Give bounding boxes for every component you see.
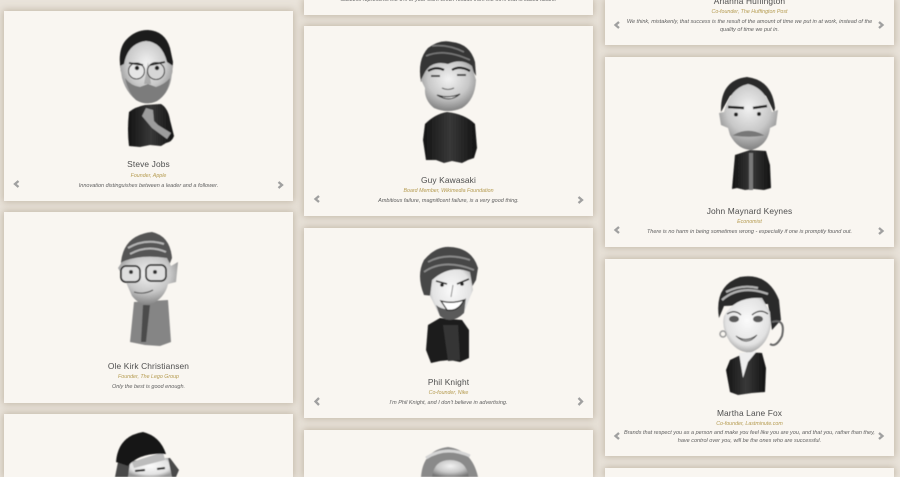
arrow: next xyxy=(278,181,284,189)
panel: bottom card column 3 (cropped) xyxy=(605,468,894,477)
name: Phil Knight xyxy=(428,376,469,386)
quote: Only the best is good enough. xyxy=(112,384,185,390)
quote: quality of time we put in. xyxy=(720,27,779,33)
quote: I'm Phil Knight, and I don't believe in advertising. xyxy=(390,400,507,406)
quote xyxy=(624,430,875,444)
quote xyxy=(627,19,872,33)
name: Martha Lane Fox xyxy=(717,408,782,418)
panel: bottom card column 2 (cropped) xyxy=(304,430,593,477)
panel: Guy Kawasaki xyxy=(304,26,593,216)
arrow: next xyxy=(878,21,884,29)
panel: Arianna Huffington (cropped) xyxy=(605,0,894,45)
portrait: cropped man xyxy=(420,446,478,477)
quote: We think, mistakenly, that success is the result of the amount of time we put in at work, instead of the xyxy=(627,19,872,25)
role: Co-founder, Lastminute.com xyxy=(716,420,783,426)
panel: Ole Kirk Christiansen xyxy=(4,212,293,402)
name: Steve Jobs xyxy=(127,159,170,169)
arrow: next xyxy=(578,397,584,406)
portrait: Guy Kawasaki xyxy=(419,40,478,164)
arrow: previous xyxy=(314,397,320,406)
arrow: previous xyxy=(614,432,620,440)
name: John Maynard Keynes xyxy=(707,206,792,216)
portrait: woman in hat xyxy=(114,431,180,477)
quote: There is no harm in being sometimes wrong - especially if one is promptly found out. xyxy=(647,228,852,234)
quote: Innovation distinguishes between a leader and a follower. xyxy=(79,182,218,188)
quote: have control over you, will be the ones who are successful. xyxy=(678,438,821,444)
role: Founder, The Lego Group xyxy=(118,374,179,380)
portrait: Martha Lane Fox xyxy=(717,275,785,396)
panel: John Maynard Keynes xyxy=(605,57,894,247)
arrow: previous xyxy=(614,21,620,29)
role: Board Member, Wikimedia Foundation xyxy=(403,188,494,194)
role: Co-founder, The Huffington Post xyxy=(712,9,787,15)
arrow: next xyxy=(878,432,884,440)
arrow: previous xyxy=(614,226,620,234)
panel: Phil Knight xyxy=(304,228,593,418)
arrow: next xyxy=(878,227,884,235)
quote: Brands that respect you as a person and make you feel like you are you, and that you, rather than they, xyxy=(624,430,875,436)
portrait: John Maynard Keynes xyxy=(718,76,778,191)
arrow: previous xyxy=(314,195,320,203)
portrait: Ole Kirk Christiansen xyxy=(118,231,178,347)
arrow: next xyxy=(578,196,584,204)
panel: woman in hat (cropped) xyxy=(4,414,293,477)
panel: Martha Lane Fox xyxy=(605,259,894,456)
portrait: Phil Knight xyxy=(419,246,479,364)
role: Founder, Apple xyxy=(131,172,166,178)
name: Ole Kirk Christiansen xyxy=(108,361,189,371)
panel: Steve Jobs xyxy=(4,11,293,201)
arrow: previous xyxy=(13,180,20,188)
role: Co-founder, Nike xyxy=(429,390,468,396)
name: Guy Kawasaki xyxy=(421,175,476,185)
quote: Ambitious failure, magnificent failure, is a very good thing. xyxy=(378,198,519,204)
panel: top card column 2 (cropped) xyxy=(304,0,593,15)
role: Economist xyxy=(737,218,762,224)
portrait: Steve Jobs xyxy=(118,29,175,148)
